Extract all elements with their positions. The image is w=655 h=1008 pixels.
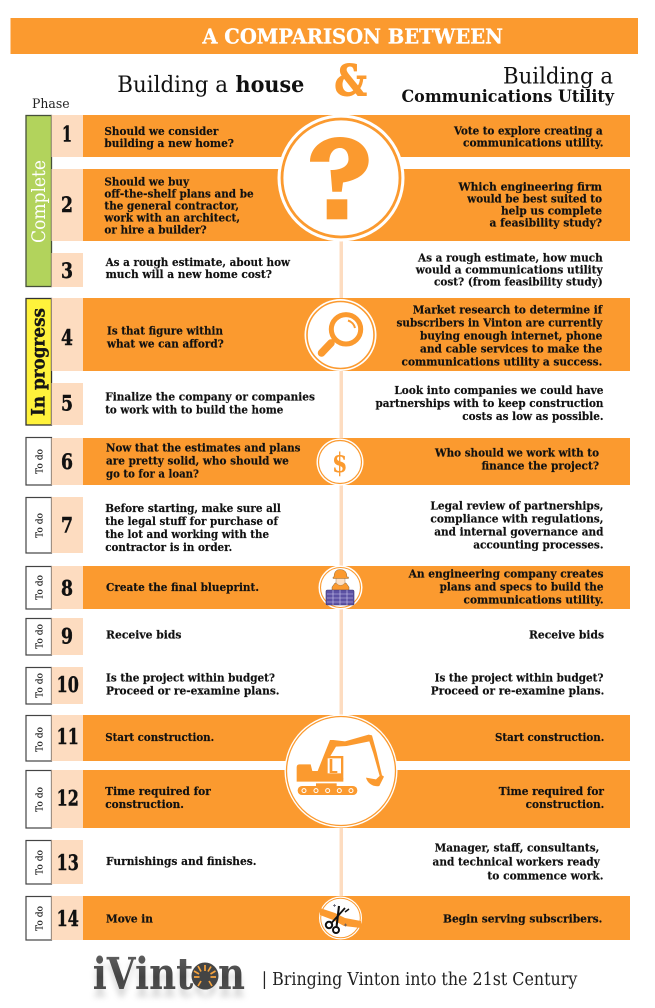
phase 5 row (52, 383, 604, 425)
heading: building a house: house (236, 72, 304, 98)
phase 6 row: finance the project? (482, 458, 599, 472)
title banner: A COMPARISON BETWEEN (201, 24, 503, 48)
phase 9 row: 9 (61, 623, 73, 648)
phase 8 row: 8 (61, 575, 73, 600)
heading: building a house: Building a (117, 72, 228, 98)
phase 6 row: are pretty solid, who should we (106, 453, 289, 467)
phase 7 row (26, 497, 604, 554)
phase 4 row: communications utility a success. (402, 354, 602, 368)
phase 13 row: to commence work. (487, 869, 604, 883)
phase 2 row (52, 169, 630, 241)
phase 2 row: or hire a builder? (104, 222, 207, 236)
title banner (10, 18, 638, 54)
phase 8 row: Create the final blueprint. (106, 580, 259, 594)
phase 3 row (52, 250, 603, 288)
heading: building a communications utility: Building a (503, 63, 613, 89)
icon: dollar sign (316, 438, 364, 486)
phase 12 row: Time required for (499, 784, 605, 798)
phase 11 row: Start construction. (105, 730, 214, 744)
phase 3 row: As a rough estimate, how much (417, 250, 603, 264)
phase 14 row: Begin serving subscribers. (443, 912, 602, 926)
phase 13 row: To do (34, 850, 46, 875)
phase 4 row: Is that figure within (107, 323, 223, 337)
phase 1 row: Should we consider (104, 124, 219, 138)
phase 4 row (52, 298, 630, 371)
phase 5 row: Finalize the company or companies (105, 390, 315, 404)
phase 4 row: Market research to determine if (413, 302, 603, 316)
center timeline line (340, 115, 343, 900)
logo: iVinton: iVinton (93, 949, 245, 1000)
phase 13 row: and technical workers ready (432, 855, 600, 869)
phase 8 row: An engineering company creates (408, 566, 604, 580)
phase 11 row: Start construction. (495, 730, 604, 744)
phase 14 row: Move in (106, 912, 153, 926)
phase 4 row: and cable services to make the (420, 341, 602, 355)
phase 5 row: 5 (61, 391, 73, 416)
phase 7 row: and internal governance and (434, 525, 604, 539)
phase 3 row: would a communications utility (415, 262, 603, 276)
phase 4 row: what we can afford? (106, 336, 224, 350)
phase 10 row: Is the project within budget? (106, 670, 275, 684)
phase 2 row: help us complete (501, 204, 602, 218)
phase 9 row: Receive bids (529, 628, 604, 642)
phase 13 row: 13 (57, 850, 79, 875)
phase 2 row: Which engineering firm (458, 180, 602, 194)
phase 3 row: As a rough estimate, about how (105, 255, 290, 269)
phase 6 row: To do (34, 449, 46, 474)
phase 2 row: work with an architect, (103, 210, 240, 224)
phase 1 row: building a new home? (104, 136, 234, 150)
phase 5 row: Look into companies we could have (394, 383, 604, 397)
phase 7 row: Legal review of partnerships, (430, 499, 604, 513)
icon: question mark (278, 114, 404, 242)
phase 10 row: To do (34, 673, 46, 698)
phase 1 row: 1 (62, 122, 72, 147)
phase 5 row: partnerships with to keep construction (376, 396, 604, 410)
phase 7 row: the lot and working with the (105, 527, 269, 541)
phase 2 row: would be best suited to (466, 192, 602, 206)
phase 2 row: off-the-shelf plans and be (104, 186, 254, 200)
phase 7 row: accounting processes. (473, 538, 604, 552)
phase 9 row: Receive bids (106, 628, 182, 642)
phase 10 row: Proceed or re-examine plans. (106, 683, 280, 697)
phase 8 row: communications utility. (464, 592, 604, 606)
phase 6 row: go to for a loan? (106, 466, 199, 480)
icon: ribbon and scissors (319, 896, 362, 940)
phase 12 row: To do (34, 787, 46, 812)
phase 1 row: communications utility. (463, 135, 604, 149)
phase 2 row: the general contractor, (104, 198, 239, 212)
phase 12 row: Time required for (105, 784, 212, 798)
phase 2 row: a feasibility study? (490, 216, 602, 230)
phase 7 row: contractor is in order. (105, 540, 232, 554)
phase column heading: Phase (32, 97, 70, 112)
phase 4 row: 4 (61, 325, 73, 350)
heading: building a communications utility: Communications Utility (402, 87, 615, 107)
phase 6 row (26, 438, 630, 485)
phase 2 row: Should we buy (104, 174, 189, 188)
phase 13 row: Manager, staff, consultants, (435, 841, 599, 855)
phase 5 row: to work with to build the home (105, 403, 283, 417)
phase 10 row: Is the project within budget? (435, 670, 604, 684)
icon: magnifying glass (304, 299, 376, 371)
phase 7 row: To do (34, 513, 46, 538)
phase 8 row: To do (34, 575, 46, 600)
phase 8 row: plans and specs to build the (440, 579, 604, 593)
phase 3 row: much will a new home cost? (106, 267, 272, 281)
phase 7 row: the legal stuff for purchase of (105, 514, 279, 528)
phase 12 row: construction. (526, 797, 604, 811)
ampersand: & (334, 56, 367, 106)
phase 7 row: 7 (61, 512, 73, 537)
phase 3 row: 3 (61, 258, 73, 283)
phase 1 row: Vote to explore creating a (453, 123, 603, 137)
phase 14 row (26, 896, 630, 940)
phase 6 row: Who should we work with to (434, 445, 599, 459)
phase 11 row (26, 715, 630, 761)
heading: building a communications utility (402, 63, 615, 107)
phase 7 row: compliance with regulations, (430, 512, 604, 526)
phase 6 row: Now that the estimates and plans (106, 440, 300, 454)
phase 13 row (26, 840, 604, 884)
phase 10 row (26, 667, 604, 704)
logo: iVinton: iVinton (93, 957, 245, 1008)
phase 3 row: cost? (from feasibility study) (434, 274, 603, 288)
icon: excavator (284, 714, 398, 828)
phase 9 row: To do (34, 624, 46, 649)
phase 12 row: construction. (105, 797, 184, 811)
phase 14 row: To do (34, 906, 46, 931)
phase 4 row: subscribers in Vinton are currently (396, 315, 603, 329)
icon: engineer with blueprint (318, 566, 362, 610)
icon: dollar sign: $ (332, 448, 348, 479)
phase 12 row (26, 770, 630, 828)
phase 2 row: 2 (61, 192, 73, 217)
phase 14 row: 14 (57, 906, 79, 931)
phase 11 row: To do (34, 727, 46, 752)
phase 9 row (26, 618, 604, 655)
phase 5 row: costs as low as possible. (462, 409, 604, 423)
phase 8 row (26, 566, 630, 609)
heading: building a house (117, 72, 304, 98)
phase 11 row: 11 (57, 724, 79, 749)
status: complete: Complete (28, 160, 50, 243)
phase 4 row: buying enough internet, phone (420, 328, 602, 342)
phase 10 row: Proceed or re-examine plans. (431, 683, 604, 697)
phase 7 row: Before starting, make sure all (105, 501, 281, 515)
phase 12 row: 12 (57, 786, 79, 811)
phase 6 row: 6 (61, 449, 73, 474)
status: complete (26, 116, 52, 286)
tagline: | Bringing Vinton into the 21st Century (262, 970, 577, 990)
phase 1 row (52, 115, 630, 157)
phase 13 row: Furnishings and finishes. (106, 854, 257, 868)
status: in progress: In progress (28, 308, 50, 416)
phase 10 row: 10 (57, 672, 79, 697)
